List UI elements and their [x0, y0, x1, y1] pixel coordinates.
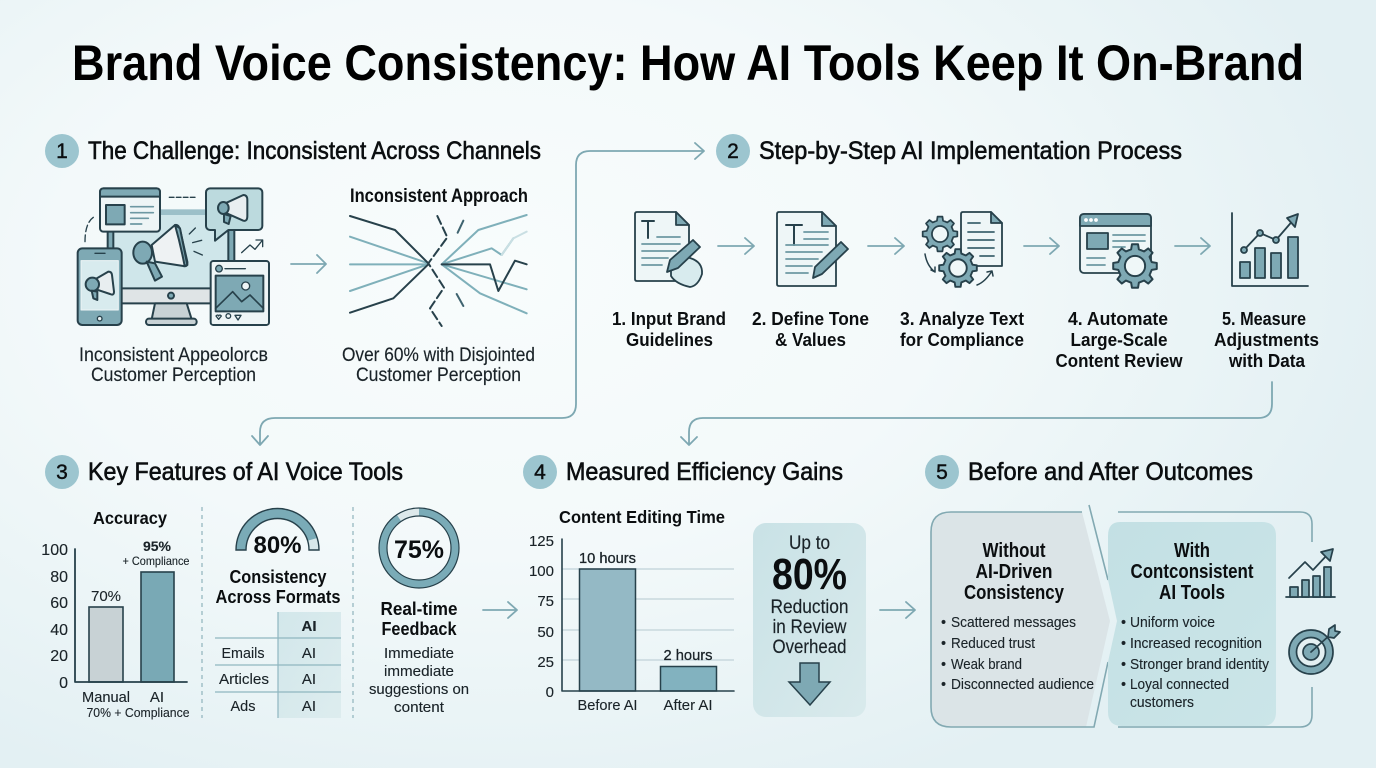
panel: with AI: Contconsistent [1130, 561, 1254, 583]
callout: 80 percent reduction [753, 523, 866, 717]
heading: section 5: Before and After Outcomes [968, 458, 1253, 486]
bar chart: content editing time: 75 [537, 593, 554, 610]
text: step 4 label: Content Review [1056, 350, 1183, 371]
bar chart: accuracy: 40 [50, 622, 68, 639]
gauge: 80 percent [236, 508, 319, 559]
bar chart: content editing time: Content Editing Time [559, 507, 725, 527]
bar chart: accuracy: 80 [50, 569, 68, 586]
panel: with AI: • [1121, 636, 1126, 652]
text: step 4 label: 4. Automate [1068, 308, 1168, 329]
panel: without AI: Consistency [964, 582, 1065, 604]
text: step 2 label: & Values [775, 329, 846, 350]
panel: with AI: • [1121, 657, 1126, 673]
panel: section 5 outcomes [925, 455, 1340, 727]
heading: section 2: Step-by-Step AI Implementation Process [759, 137, 1182, 165]
arrow: section 2 to 4 [681, 382, 1272, 445]
arrow: step 2 to 3 [868, 238, 904, 254]
heading: section 3 [45, 455, 403, 489]
text: step 3 label: 3. Analyze Text [900, 308, 1024, 329]
table: formats [215, 612, 341, 718]
text: left caption: Customer Perception [91, 365, 256, 386]
panel: without AI: • [941, 636, 946, 652]
panel: with AI: Stronger brand identity [1130, 657, 1270, 673]
table: formats: Ads [230, 698, 256, 715]
heading: section 1: The Challenge: Inconsistent Across Channels [88, 137, 541, 165]
icon: growth chart [1286, 549, 1335, 597]
bar chart: accuracy: 70% + Compliance [86, 705, 190, 720]
bar chart: accuracy: AI [150, 689, 164, 706]
panel: with AI: With [1174, 540, 1210, 562]
text: step 2 label [752, 308, 869, 350]
panel: section 2 process [612, 134, 1319, 371]
bar chart: content editing time [529, 507, 734, 714]
text: right caption [342, 345, 535, 386]
panel: without AI: • [941, 657, 946, 673]
panel: with AI: customers [1130, 695, 1194, 711]
text: step 5 label [1214, 308, 1319, 371]
bar chart: content editing time: After AI [664, 697, 712, 714]
heading: section 5: 5 [936, 461, 948, 484]
panel: with AI: Uniform voice [1130, 615, 1215, 631]
arrow: step 1 to 2 [718, 238, 754, 254]
bar chart: accuracy: 70% [91, 588, 121, 605]
text: real-time feedback: Feedback [382, 618, 457, 639]
text: step 5 label: with Data [1228, 350, 1306, 371]
bar chart: accuracy: 95% [143, 538, 172, 554]
gauge: 80 percent: 80% [253, 532, 302, 559]
panel: without AI: Without [982, 540, 1046, 562]
table: formats: AI [302, 645, 316, 662]
callout: 80 percent reduction: 80% [772, 550, 847, 599]
text: consistency heading: Consistency [230, 566, 327, 587]
bar chart: accuracy: 100 [41, 542, 68, 559]
arrow: to inconsistent approach [291, 255, 326, 273]
heading: section 4: Measured Efficiency Gains [566, 458, 843, 486]
bar chart: accuracy: 60 [50, 595, 68, 612]
panel: section 1 challenge [45, 134, 541, 386]
table: formats: AI [302, 618, 316, 635]
heading: section 1: 1 [56, 140, 68, 163]
bar chart: content editing time: 2 hours [664, 647, 712, 664]
panel: with AI: • [1121, 677, 1126, 693]
icon: analyze gears [923, 212, 1002, 287]
bar chart: accuracy [41, 508, 190, 720]
bar chart: content editing time: 100 [529, 563, 554, 580]
donut: 75 percent: 75% [394, 536, 444, 564]
text: step 4 label [1056, 308, 1183, 371]
icon: measure chart [1232, 213, 1308, 286]
text: real-time feedback [369, 598, 469, 716]
heading: section 1 [45, 134, 541, 168]
bar chart: accuracy: Accuracy [93, 508, 167, 528]
panel: without AI [931, 505, 1110, 727]
panel: without AI: AI-Driven [976, 561, 1052, 583]
callout: 80 percent reduction: Overhead [772, 637, 846, 658]
panel: with AI: Increased recognition [1130, 636, 1262, 652]
table: formats: Emails [222, 645, 264, 662]
bar chart: content editing time: 0 [546, 684, 554, 701]
bar chart: accuracy: + Compliance [122, 554, 190, 568]
table: formats: Articles [219, 671, 269, 688]
icon: down arrow [789, 663, 830, 705]
donut: 75 percent [379, 508, 459, 588]
text: real-time feedback: content [394, 700, 444, 716]
text: left caption: Inconsistent Appeolorcв [79, 345, 268, 366]
table: formats: AI [302, 698, 316, 715]
icon: define tone [777, 212, 848, 286]
arrow: section 1 to 2 and 3 [252, 143, 704, 445]
panel: with AI [1108, 512, 1312, 727]
text: left caption [79, 345, 268, 386]
text: step 1 label: Guidelines [626, 329, 713, 350]
text: real-time feedback: Immediate [384, 646, 454, 662]
text: right caption: Customer Perception [356, 365, 521, 386]
text: step 2 label: 2. Define Tone [752, 308, 869, 329]
heading: section 3: Key Features of AI Voice Tools [88, 458, 403, 486]
callout: 80 percent reduction: in Review [772, 617, 847, 638]
icon: automate review [1080, 214, 1157, 288]
text: consistency heading: Across Formats [216, 586, 340, 607]
bar chart: accuracy: 0 [59, 675, 68, 692]
bar chart: content editing time: 25 [537, 654, 554, 671]
panel: without AI: Disconnected audience [951, 677, 1094, 693]
panel: without AI: Reduced trust [951, 636, 1035, 652]
heading: section 4 [523, 455, 843, 489]
text: real-time feedback: suggestions on [369, 682, 469, 698]
arrow: step 4 to 5 [1175, 238, 1210, 254]
heading: section 2: 2 [727, 140, 739, 163]
heading: section 4: 4 [534, 461, 546, 484]
arrow: section 3 to 4 [483, 602, 517, 618]
text: step 3 label [900, 308, 1024, 350]
text: step 3 label: for Compliance [900, 329, 1024, 350]
bar chart: content editing time: 125 [529, 533, 554, 550]
table: formats: AI [302, 671, 316, 688]
panel: without AI: • [941, 677, 946, 693]
chart: fractured lines [350, 215, 527, 326]
text: step 1 label: 1. Input Brand [612, 308, 726, 329]
panel: with AI: AI Tools [1159, 582, 1225, 604]
panel: without AI: Scattered messages [951, 615, 1076, 631]
text: step 5 label: Adjustments [1214, 329, 1319, 350]
icon: input guidelines [635, 212, 702, 287]
callout: 80 percent reduction: Up to [789, 533, 830, 554]
arrow: section 4 to 5 [880, 602, 915, 618]
arrow: step 3 to 4 [1024, 238, 1059, 254]
panel: section 4 efficiency [523, 455, 866, 717]
text: step 4 label: Large-Scale [1070, 329, 1168, 350]
panel: section 3 features [41, 455, 469, 720]
text: step 5 label: 5. Measure [1222, 308, 1306, 329]
text: consistency heading [216, 566, 340, 607]
icon: target [1289, 625, 1340, 674]
bar chart: content editing time: Before AI [578, 697, 638, 714]
bar chart: content editing time: 10 hours [579, 550, 636, 567]
callout: 80 percent reduction: Reduction [770, 597, 848, 618]
bar chart: accuracy: 20 [50, 648, 68, 665]
text: step 1 label [612, 308, 726, 350]
panel: without AI: Weak brand [951, 657, 1022, 673]
icon: devices and megaphones [78, 188, 269, 325]
panel: with AI: Loyal connected [1130, 677, 1229, 693]
panel: with AI: • [1121, 615, 1126, 631]
heading: section 3: 3 [56, 461, 68, 484]
text: right caption: Over 60% with Disjointed [342, 345, 535, 366]
bar chart: accuracy: Manual [82, 689, 130, 706]
text: real-time feedback: immediate [384, 664, 454, 680]
heading: inconsistent approach: Inconsistent Approach [350, 186, 528, 207]
bar chart: content editing time: 50 [537, 624, 554, 641]
heading: section 5 [925, 455, 1253, 489]
text: real-time feedback: Real-time [380, 598, 458, 619]
panel: without AI: • [941, 615, 946, 631]
